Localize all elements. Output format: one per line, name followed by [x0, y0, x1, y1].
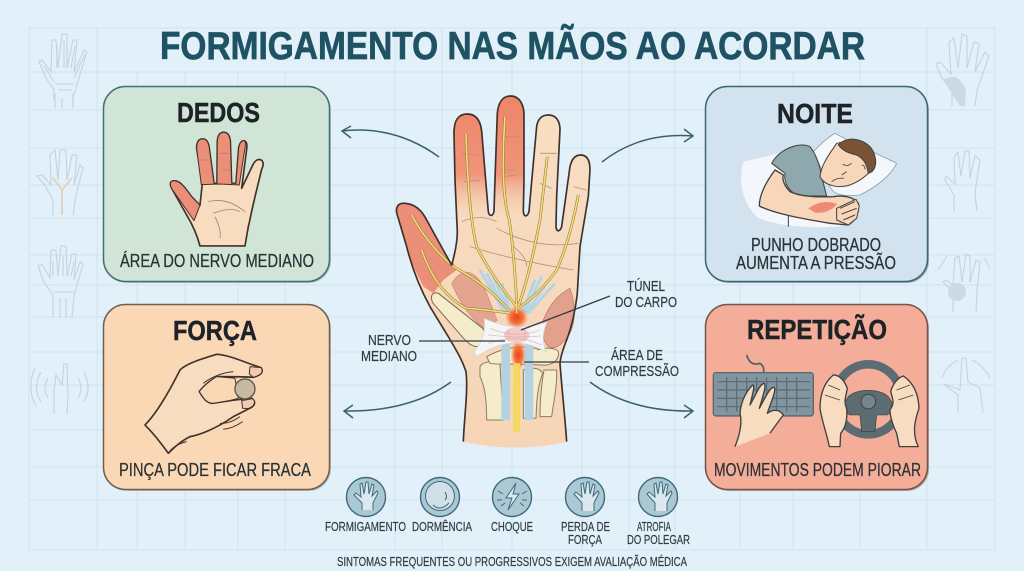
decorative hand: skeleton left [38, 246, 83, 318]
arrow: to dedos [342, 126, 439, 157]
label: nervo mediano: NERVO [368, 333, 411, 349]
heading: dedos: DEDOS [177, 97, 260, 128]
label: atrofia do polegar: ATROFIA [637, 520, 671, 534]
arrow: to forca [344, 382, 451, 418]
thumb metacarpal bone [431, 293, 485, 347]
label: formigamento: FORMIGAMENTO [325, 520, 406, 534]
icon: choque [492, 478, 532, 516]
caption: forca: PINÇA PODE FICAR FRACA [119, 460, 311, 480]
label line: tunel do carpo [521, 296, 610, 330]
forearm tendons [506, 337, 529, 420]
label: area de compressao [595, 347, 679, 380]
lower nerve trunk [507, 363, 527, 432]
hand silhouette fill [396, 96, 590, 448]
median nerve outline [412, 117, 578, 413]
label: nervo mediano: MEDIANO [361, 349, 417, 365]
label: choque: CHOQUE [491, 520, 533, 534]
compression hotspot [505, 305, 529, 329]
icon: perda de forca [566, 478, 604, 516]
footer note: SINTOMAS FREQUENTES OU PROGRESSIVOS EXIGEM AVALIAÇÃO MÉDICA [337, 554, 688, 569]
panel: repeticao [706, 304, 929, 491]
icon: dormencia [420, 478, 460, 516]
panel: dedos [104, 86, 331, 283]
decorative hand: pointing right [942, 358, 990, 413]
label: perda de forca [561, 520, 610, 547]
hand outline [396, 96, 590, 442]
label: area de compressao: ÁREA DE [611, 347, 663, 364]
label: tunel do carpo: DO CARPO [615, 295, 677, 311]
heading: noite: NOITE [777, 98, 853, 129]
decorative hand: vibration left [31, 364, 88, 414]
decorative hand: nerve left [37, 150, 83, 215]
thenar muscles [452, 272, 497, 328]
icon: pinching hand with coin [145, 354, 262, 453]
icon: open hand with median nerve area [170, 132, 263, 246]
icon: steering wheel with hands [820, 364, 919, 447]
ligament redness [504, 327, 529, 343]
heading: forca: FORÇA [173, 315, 257, 346]
blue tendons in palm [480, 270, 555, 313]
label line: area de compressao [524, 361, 589, 363]
decorative hand: outline right [945, 151, 980, 211]
label line: nervo mediano [419, 340, 505, 342]
central hand anatomy diagram [393, 93, 590, 448]
label: tunel do carpo: TÚNEL [627, 278, 665, 295]
label: tunel do carpo [615, 278, 677, 311]
median nerve core [412, 117, 578, 313]
caption: noite line 1: PUNHO DOBRADO [751, 235, 881, 255]
heading: repeticao: REPETIÇÃO [747, 314, 887, 345]
caption: repeticao: MOVIMENTOS PODEM PIORAR [714, 460, 921, 480]
forearm bones [480, 362, 557, 420]
label: nervo mediano [361, 333, 417, 365]
carpal bones [487, 347, 558, 365]
caption: dedos: ÁREA DO NERVO MEDIANO [120, 251, 314, 271]
red finger and thumb zones [393, 93, 526, 293]
label: atrofia do polegar [627, 520, 690, 547]
label: dormencia: DORMÊNCIA [412, 519, 473, 534]
symptoms row [325, 478, 690, 547]
carpal ligament band [474, 318, 547, 357]
arrow: to repeticao [590, 382, 693, 418]
caption: noite line 2: AUMENTA A PRESSÃO [736, 252, 896, 273]
title: FORMIGAMENTO NAS MÃOS AO ACORDAR [160, 24, 865, 68]
icon: keyboard with hand [713, 355, 813, 447]
palm creases [462, 137, 587, 270]
label: atrofia do polegar: DO POLEGAR [627, 533, 690, 547]
ligament fibres [488, 328, 542, 345]
compression hotspot lower [510, 340, 526, 370]
label: area de compressao: COMPRESSÃO [595, 363, 679, 380]
icon: atrofia do polegar [638, 478, 678, 516]
hypothenar muscle [542, 288, 574, 348]
icon: man sleeping with bent wrist [741, 133, 897, 227]
arrow: to noite [602, 129, 693, 162]
panel: noite [706, 86, 929, 283]
label: perda de forca: PERDA DE [561, 520, 610, 534]
decorative hand: skeleton top left [39, 34, 87, 108]
decorative hand: arrows right [938, 254, 990, 312]
icon: formigamento [346, 478, 386, 516]
decorative hand: top right [936, 34, 989, 106]
panel: forca [104, 304, 331, 491]
label: perda de forca: FORÇA [568, 533, 603, 547]
